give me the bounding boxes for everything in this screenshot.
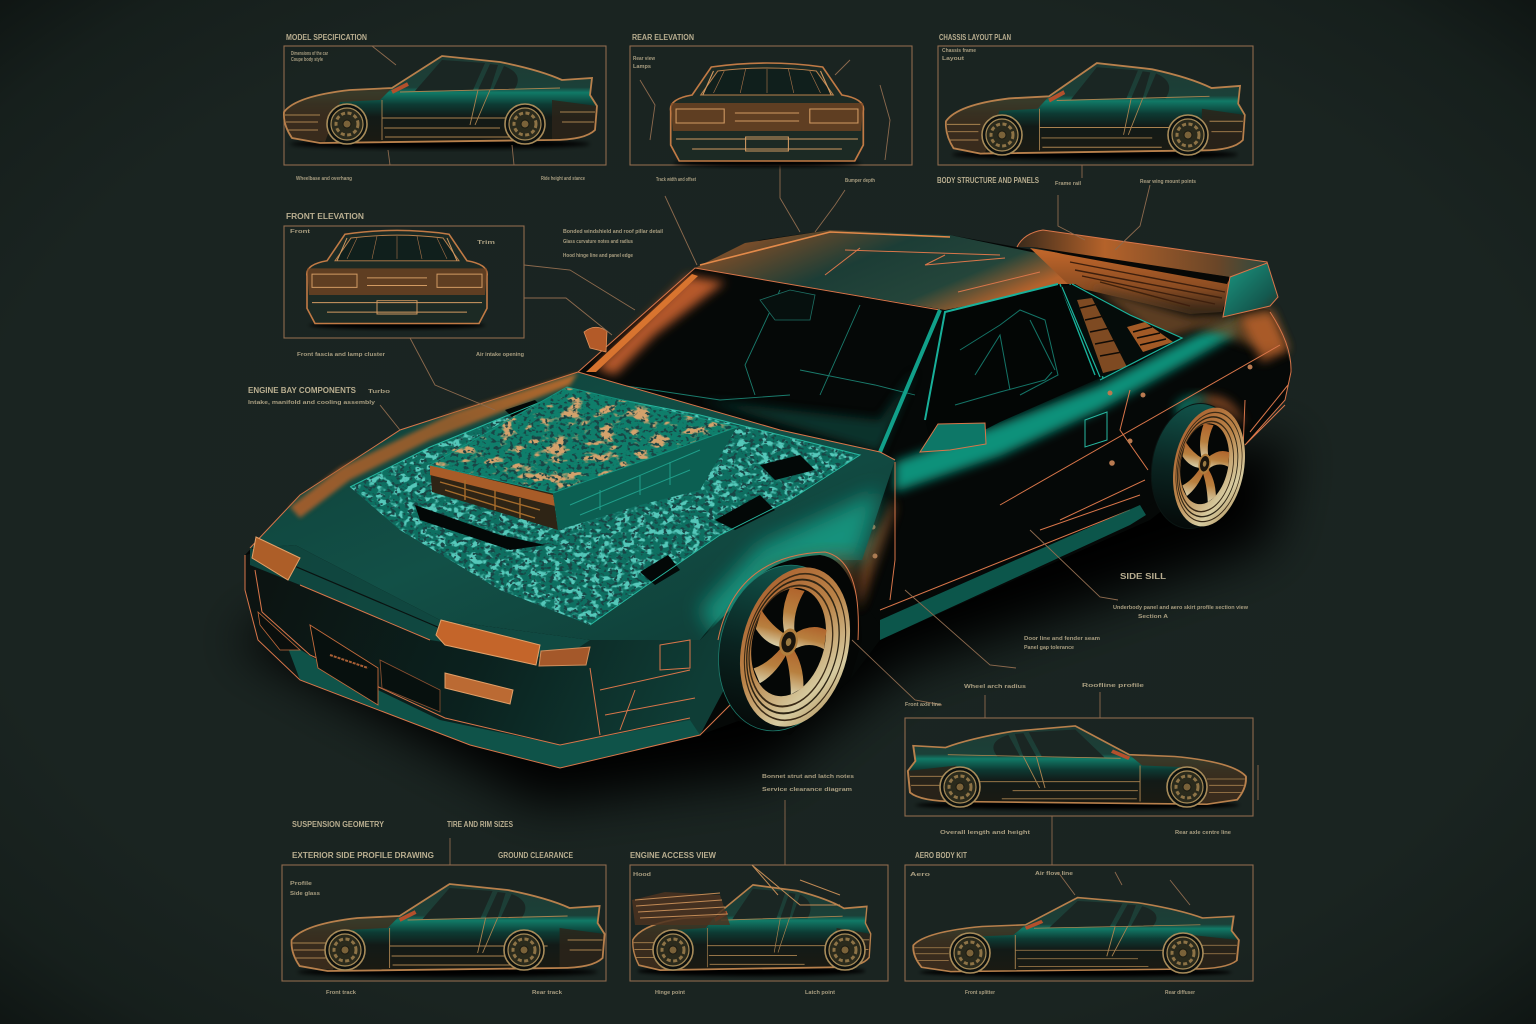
panel 3 caption middle: Frame rail — [1055, 181, 1081, 187]
headlight: side marker — [539, 647, 590, 666]
panel 8 heading: AERO BODY KIT — [915, 851, 967, 860]
panel 6 upper heading: SUSPENSION GEOMETRY — [292, 820, 385, 829]
panel 1 heading: MODEL SPECIFICATION — [286, 33, 367, 42]
callout: door: Door line and fender seam — [1024, 636, 1100, 642]
callout: engine heading: Intake, manifold and cooling assembly — [248, 400, 376, 406]
panel 6: side view: Profile — [290, 881, 312, 887]
panel 5 caption top left: Wheel arch radius — [964, 684, 1026, 690]
panel 5 caption side: Front axle line — [905, 702, 941, 708]
panel 6 upper right heading: TIRE AND RIM SIZES — [447, 820, 514, 829]
panel 8: side view: Air flow line — [1035, 871, 1073, 877]
panel 1: side view — [284, 46, 606, 165]
headlight: main — [436, 620, 540, 665]
hood edge highlight — [290, 373, 578, 518]
callout: engine heading: Turbo — [368, 389, 391, 395]
panel 6 caption left: Front track — [326, 990, 357, 996]
panel 2: rear view: Lamps — [633, 64, 651, 70]
rear quarter window — [1060, 284, 1182, 380]
engine bay — [350, 398, 862, 626]
ground shadow — [235, 440, 1290, 805]
side window with seats — [925, 284, 1103, 445]
panel 7: open hood view: Hood — [633, 872, 651, 878]
panel 6: side view — [282, 865, 606, 981]
callout: windshield: Glass curvature notes and radius — [563, 239, 633, 245]
panel 2 caption right: Bumper depth — [845, 178, 876, 184]
callout: windshield — [563, 229, 663, 259]
callout: door: Panel gap tolerance — [1024, 645, 1074, 651]
panel 7 heading: ENGINE ACCESS VIEW — [630, 851, 716, 860]
panel 7 caption left: Hinge point — [655, 990, 685, 996]
panel 1: side view: Dimensions of the car — [291, 51, 329, 57]
panel 6 caption right: Rear track — [532, 990, 563, 996]
panel 3: cutaway side view: Layout — [942, 56, 964, 62]
body base — [245, 230, 1292, 768]
panel 1: side view: Coupe body style — [291, 57, 323, 63]
door and rear quarter panel — [860, 308, 1291, 640]
panel 3 heading: CHASSIS LAYOUT PLAN — [939, 33, 1011, 42]
headlight: left marker — [252, 537, 300, 580]
panel 5 caption bottom left: Overall length and height — [940, 830, 1030, 836]
callout: side sill: Section A — [1138, 614, 1168, 620]
panel 4 heading: FRONT ELEVATION — [286, 212, 364, 221]
panel 5 caption bottom right: Rear axle centre line — [1175, 830, 1231, 836]
panel 7 upper caption 2: Service clearance diagram — [762, 787, 852, 793]
panel 3 caption: heading: BODY STRUCTURE AND PANELS — [937, 176, 1040, 185]
panel 1 caption left: Wheelbase and overhang — [296, 176, 352, 182]
panel 4 caption right: Air intake opening — [476, 352, 524, 358]
hood panel — [250, 372, 895, 640]
panel 3: cutaway side view — [938, 46, 1253, 165]
windshield — [578, 268, 940, 452]
panel 8: side view: Aero — [910, 872, 931, 878]
side mirror near — [920, 423, 986, 452]
roof panel — [695, 230, 1075, 310]
callout: side sill: SIDE SILL — [1120, 572, 1166, 581]
callout: engine heading: ENGINE BAY COMPONENTS — [248, 386, 357, 395]
fog lamp — [445, 673, 513, 704]
panel 2 caption left: Track width and offset — [656, 177, 696, 183]
front wheel — [702, 551, 866, 745]
panel 4: front view: Front — [290, 229, 310, 235]
panel 4 caption left: Front fascia and lamp cluster — [297, 352, 386, 358]
panel 2: rear view — [630, 46, 912, 167]
panel 5 caption top right: Roofline profile — [1082, 683, 1144, 689]
panel 6: side view: Side glass — [290, 891, 320, 897]
rear wheel — [1142, 396, 1254, 536]
panel 3 caption right: Rear wing mount points — [1140, 179, 1196, 185]
leader lines — [380, 165, 1258, 865]
panel 7 caption right: Latch point — [805, 990, 835, 996]
callout: side sill — [1113, 572, 1249, 620]
callout: door — [1024, 636, 1100, 651]
panel 2: rear view: Rear view — [633, 56, 656, 62]
panel 6 heading: EXTERIOR SIDE PROFILE DRAWING — [292, 851, 434, 860]
callout: windshield: Bonded windshield and roof pillar detail — [563, 229, 663, 235]
callout: engine heading — [248, 386, 391, 406]
panel 8: side view — [905, 865, 1253, 981]
panel 1 caption right: Ride height and stance — [541, 176, 585, 182]
panel 7 upper caption: Bonnet strut and latch notes — [762, 774, 854, 780]
panel 2 heading: REAR ELEVATION — [632, 33, 694, 42]
panel 8 caption left: Front splitter — [965, 990, 996, 996]
main car: sports car cutaway — [235, 230, 1292, 805]
front bumper and nose — [245, 545, 745, 768]
side mirror far — [584, 327, 607, 352]
spoiler wing — [1017, 230, 1278, 317]
callout: windshield: Hood hinge line and panel edge — [563, 253, 633, 259]
panel 5: flipped side view — [905, 718, 1253, 816]
rear deck louvres — [1030, 248, 1240, 340]
panel 7: open hood view — [630, 865, 888, 981]
panel 3: cutaway side view: Chassis frame — [942, 48, 976, 54]
engine block — [420, 380, 750, 530]
panel 8 caption right: Rear diffuser — [1165, 990, 1196, 996]
callout: side sill: Underbody panel and aero skirt profile section view — [1113, 605, 1249, 611]
panel 4: front view — [284, 226, 524, 338]
panel 4: front view: Trim — [477, 240, 495, 246]
panel 6 right heading: GROUND CLEARANCE — [498, 851, 574, 860]
